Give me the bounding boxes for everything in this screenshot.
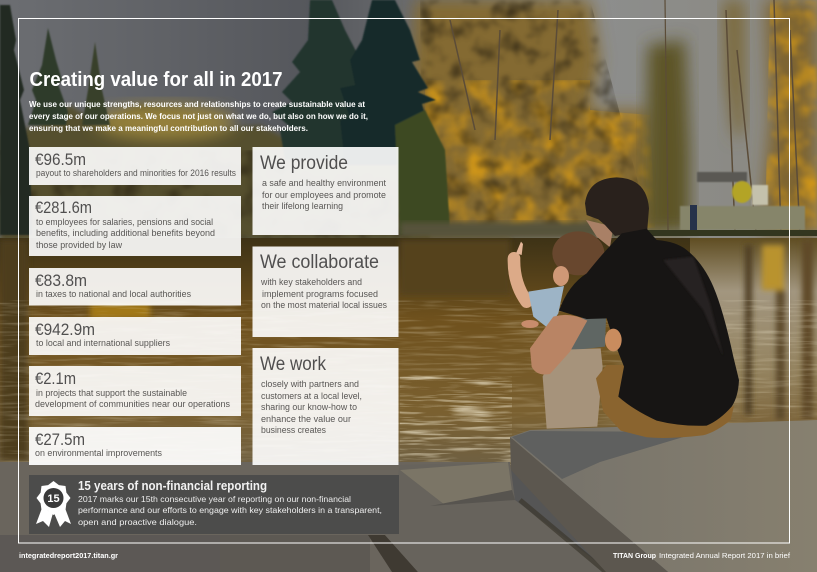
father trousers [596,365,734,438]
father hair [585,177,649,236]
intro text [29,99,368,133]
icon: 15 years award badge [36,481,71,527]
card: employees: €281.6m [35,198,92,217]
child [514,231,606,429]
card: taxes: in taxes to national and local authorities [36,289,192,299]
card: we work: closely with partners and [261,379,359,389]
card: suppliers [29,317,241,355]
card: we work: We work [260,354,326,375]
card: shareholders payout [29,147,241,185]
card: suppliers: to local and international suppliers [36,338,171,348]
card: environment: on environmental improvements [35,448,163,458]
card: environment [29,427,241,465]
card: communities: in projects that support the sustainable [36,388,187,398]
card: suppliers: €942.9m [35,320,95,339]
icon: 15 years award badge: 15 [47,493,60,505]
card: taxes [29,268,241,306]
card: we work: customers at a local level, [261,391,362,401]
card: environment: €27.5m [35,430,85,449]
card: communities: €2.1m [35,369,76,388]
firs [0,0,450,235]
card: we collaborate: implement programs focused [262,289,378,299]
card: we provide: for our employees and promote [262,190,386,200]
card: we collaborate: We collaborate [260,252,379,273]
sky [0,0,817,240]
card: communities: development of communities near our operations [35,399,231,409]
card: communities [29,366,241,416]
intro text: ensuring that we make a meaningful contribution to all our stakeholders. [29,123,308,133]
card: shareholders payout: €96.5m [35,150,86,169]
autumn trees centre [410,0,660,235]
card: taxes: €83.8m [35,271,87,290]
child shirt [528,286,564,328]
intro text: every stage of our operations. We focus not just on what we do, but also on how we do it, [29,111,368,121]
house and fence [680,172,805,230]
title: Creating value for all in 2017 [30,68,282,91]
water [0,238,817,470]
card: we provide: their lifelong learning [262,201,343,211]
card: we provide: a safe and healthy environment [262,178,387,188]
concrete slab [510,420,817,572]
crack beside the slab [520,500,606,572]
panel: 15 years of non-financial reporting: 15 years of non-financial reporting [78,479,267,493]
treeline left [0,104,430,240]
father arm [530,315,587,375]
card: employees: to employees for salaries, pensions and social [36,217,213,227]
water ripples [0,300,817,465]
panel: 15 years of non-financial reporting: 2017 marks our 15th consecutive year of reporting on our non-financial [78,494,351,504]
father shirt [559,229,739,426]
card: we provide: We provide [260,153,348,174]
father [530,177,739,438]
lower left ground [0,462,510,572]
panel: 15 years of non-financial reporting [29,475,399,534]
intro text: We use our unique strengths, resources and relationships to create sustainable value at [29,99,365,109]
card: we provide [252,147,398,235]
card: we collaborate: with key stakeholders and [260,277,362,287]
card: employees: benefits, including additional benefits beyond [36,228,215,238]
water reflections [0,240,813,460]
footer: report title: TITAN Group [613,551,656,560]
child arm [514,258,527,302]
child hair [552,231,604,275]
child hand [521,320,539,328]
card: employees [29,196,241,256]
footer: report title: Integrated Annual Report 2017 in brief [659,551,791,560]
panel: 15 years of non-financial reporting: performance and our efforts to engage with key stakeholders in a transparent, [78,505,382,515]
card: we collaborate: on the most material local issues [261,300,388,310]
card: we collaborate [252,246,398,337]
card: we work [252,348,398,465]
panel: 15 years of non-financial reporting: open and proactive dialogue. [78,517,197,527]
autumn trees right [645,0,817,235]
figure in the distance [690,205,697,231]
card: employees: those provided by law [36,240,123,250]
card: we work: business creates [261,425,327,435]
card: shareholders payout: payout to shareholders and minorities for 2016 results [36,168,237,178]
bare trunks [450,0,800,235]
father neck [586,220,613,247]
footer: website: integratedreport2017.titan.gr [19,551,118,560]
card: we work: sharing our know-how to [261,402,357,412]
card: we work: enhance the value our [261,414,351,424]
far bank [400,222,640,238]
child trousers [543,348,603,429]
